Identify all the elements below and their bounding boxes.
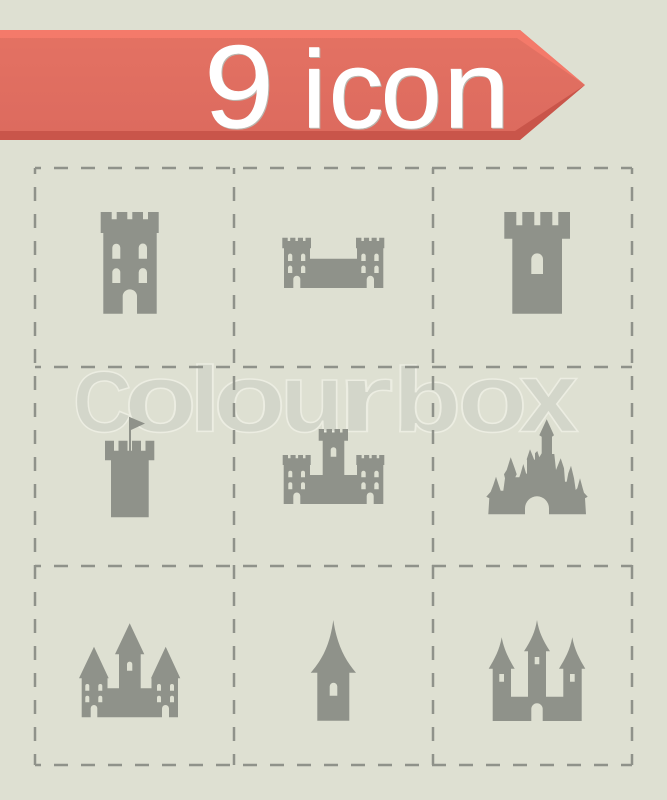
banner: 9 icon: c	[329, 28, 384, 152]
icon: tower with flag	[105, 417, 154, 517]
banner: 9 icon: 9	[204, 22, 274, 154]
icon: tower with single window	[504, 212, 570, 314]
icon: fairy-tale castle silhouette	[486, 419, 588, 514]
banner: 9 icon: i	[302, 28, 326, 152]
watermark: Colourbox: o	[458, 344, 528, 452]
watermark: Colourbox: u	[280, 344, 344, 452]
icon: castle with three curved spires	[489, 620, 585, 721]
banner: 9 icon	[0, 22, 585, 154]
watermark: Colourbox: r	[337, 344, 394, 452]
watermark: Colourbox: l	[189, 348, 221, 452]
icon: tower with four windows	[101, 212, 159, 314]
watermark: Colourbox: b	[392, 350, 462, 452]
icon: castle with three spires and small windows	[79, 623, 180, 717]
watermark: Colourbox: x	[519, 342, 579, 454]
watermark: Colourbox: o	[213, 344, 286, 452]
dashed grid	[35, 168, 632, 765]
watermark: Colourbox: C	[73, 354, 132, 450]
banner: 9 icon: o	[381, 28, 442, 152]
watermark: Colourbox: o	[124, 344, 197, 452]
banner: 9 icon: n	[443, 28, 510, 152]
icon: two towers with wall	[282, 238, 384, 288]
icon: castle with three towers	[283, 429, 384, 504]
icon: tower with tall curved spire	[311, 620, 356, 721]
